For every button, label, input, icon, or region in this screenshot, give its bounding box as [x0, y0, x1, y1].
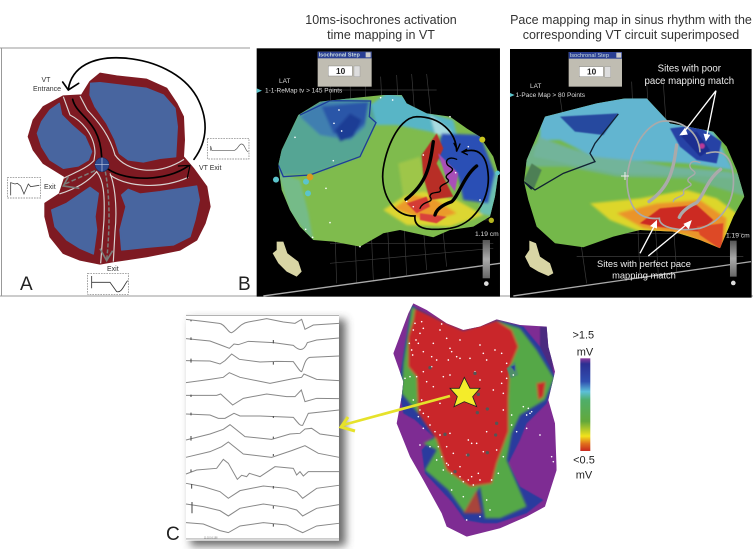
ECG inset bottom	[88, 273, 128, 294]
LAT label: LAT	[279, 78, 290, 85]
voltage legend: mV	[577, 346, 594, 358]
isochronal step dialog	[318, 52, 372, 87]
voltage legend: <0.5	[573, 455, 595, 467]
isochronal step dialog: Isochronal Step	[319, 53, 360, 59]
grid floor	[560, 82, 743, 283]
scale: 1.19 cm	[475, 231, 499, 238]
surface map	[278, 95, 498, 246]
black VT circuit	[383, 117, 488, 229]
label: bottom Exit: Exit	[107, 266, 119, 273]
white sample dots	[405, 322, 553, 520]
LAT label: LAT	[530, 83, 541, 90]
cyan pointer	[257, 88, 262, 93]
panel B: activation map	[257, 48, 503, 297]
heart thumbnail	[525, 241, 553, 276]
scale	[475, 231, 499, 286]
time axis label: 11:02:16:198	[204, 537, 218, 539]
ECG inset right	[207, 138, 249, 159]
heart thumbnail	[273, 242, 302, 277]
annotation: perfect match: mapping match	[612, 270, 676, 280]
isochronal step dialog	[569, 52, 622, 87]
label: left Exit: Exit	[44, 184, 56, 191]
blue healthy regions	[37, 83, 199, 254]
heading: activation map: 10ms-isochrones activation	[305, 13, 457, 27]
panel letter C: C	[166, 524, 180, 545]
panel B2: pace map	[510, 49, 753, 298]
marker spheres	[273, 137, 500, 223]
grey VT circuit	[627, 121, 733, 230]
heading: activation map: time mapping in VT	[327, 28, 435, 42]
isochronal step dialog: 10	[336, 66, 346, 76]
white cross marker	[621, 172, 629, 180]
panel C: voltage map	[343, 300, 595, 540]
voltage legend	[572, 329, 595, 481]
map points	[295, 98, 480, 247]
label: VT Entrance: VT	[42, 77, 51, 84]
yellow star	[450, 377, 480, 407]
isochronal step dialog: 10	[587, 67, 597, 77]
annotation: poor match: Sites with poor	[658, 64, 722, 75]
isochronal step dialog: Isochronal Step	[570, 53, 609, 59]
channel borders	[59, 96, 188, 263]
map layers	[387, 300, 563, 540]
LAT label: 1-Pace Map > 80 Points	[516, 92, 586, 99]
ECG inset left	[7, 178, 41, 198]
annotation: perfect match: Sites with perfect pace	[597, 259, 691, 269]
myocardial scar outline	[28, 73, 210, 264]
voltage legend: mV	[576, 469, 593, 481]
node marker	[95, 158, 109, 172]
shadow	[191, 319, 346, 546]
panel A: VT circuit schematic	[7, 58, 249, 294]
cyan pointer	[510, 93, 515, 97]
grey markers	[430, 368, 497, 472]
yellow arrow shaft	[343, 396, 450, 425]
annotation: poor match: pace mapping match	[644, 76, 734, 87]
label: VT Entrance: Entrance	[33, 86, 61, 93]
white annotation arrows	[640, 91, 716, 256]
voltage legend: >1.5	[572, 329, 594, 341]
heading: pace map: Pace mapping map in sinus rhythm with the	[510, 13, 752, 27]
grid floor	[323, 74, 493, 283]
heading: pace map: corresponding VT circuit superimposed	[523, 28, 739, 42]
scale	[726, 232, 750, 285]
scale: 1.19 cm	[726, 232, 750, 239]
LAT label: 1-1-ReMap tv > 145 Points	[265, 88, 343, 95]
panel letter B: B	[238, 274, 251, 295]
black circuit arrow through channel	[63, 58, 205, 178]
yellow arrow head	[341, 417, 355, 431]
grey dashed exit routes	[63, 171, 113, 261]
traces	[186, 319, 339, 533]
panel C: electrogram traces	[186, 314, 346, 546]
panel letter A: A	[20, 274, 33, 295]
label: VT Exit: VT Exit	[199, 165, 221, 172]
surface map	[524, 98, 744, 248]
trace spikes	[191, 320, 273, 527]
